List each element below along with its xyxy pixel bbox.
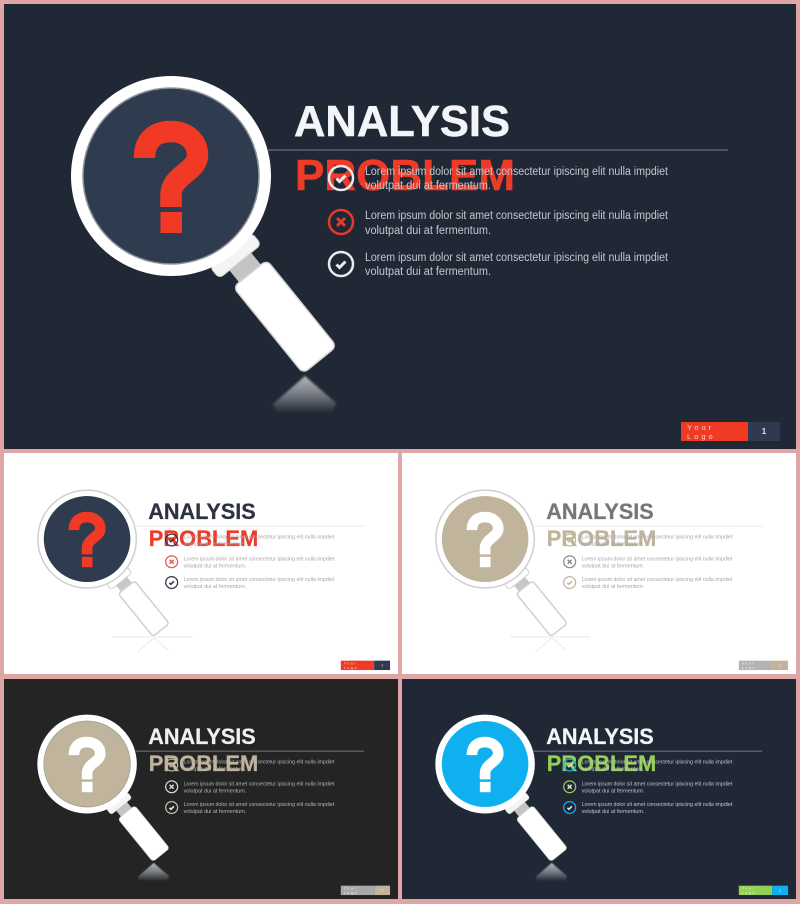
text: item 3: volutpat dui at fermentum. [365,266,491,278]
title: PROBLEM: PROBLEM [295,151,515,200]
panel: main dark navy slide [4,4,796,449]
magnifying glass [38,490,172,638]
icon: check 1 [564,759,576,771]
panel: white slide with tan accents [402,453,796,674]
text: item 3: Lorem ipsum dolor sit amet consectetur ipiscing elit nulla impdiet [582,577,733,583]
title: PROBLEM: PROBLEM [547,751,656,776]
text: item 2: volutpat dui at fermentum. [582,789,645,795]
text: item 1: Lorem ipsum dolor sit amet consectetur ipiscing elit nulla impdiet [365,166,669,178]
handle reflection [138,863,169,881]
text: item 1: Lorem ipsum dolor sit amet consectetur ipiscing elit nulla impdiet [582,760,733,766]
text: item 3: Lorem ipsum dolor sit amet consectetur ipiscing elit nulla impdiet [582,802,733,808]
footer: logo and page number: Logo [687,432,716,441]
text: item 1: volutpat dui at fermentum. [582,541,645,547]
text: item 3: volutpat dui at fermentum. [582,809,645,815]
icon: check 2 [564,577,576,588]
icon: question mark [472,742,498,792]
footer: logo and page number [739,886,788,895]
panel: white slide with red accents [4,453,398,674]
icon: cross [166,781,178,793]
icon: check 1 [329,166,353,190]
text: item 3: Lorem ipsum dolor sit amet consectetur ipiscing elit nulla impdiet [365,252,669,264]
text: item 1: Lorem ipsum dolor sit amet consectetur ipiscing elit nulla impdiet [184,535,335,541]
icon: question mark [74,742,100,792]
text: item 3: volutpat dui at fermentum. [184,584,247,590]
text: item 2: Lorem ipsum dolor sit amet consectetur ipiscing elit nulla impdiet [184,556,335,562]
footer: logo and page number [739,661,788,670]
footer: logo and page number: 1 [762,427,767,436]
icon: check 2 [166,577,178,588]
footer: logo and page number: Your [742,887,755,891]
title: ANALYSIS: ANALYSIS [546,724,654,749]
icon: cross [166,556,178,568]
magnifying glass [71,76,341,377]
icon: check 2 [166,802,178,813]
text: item 2: volutpat dui at fermentum. [365,225,491,237]
text: item 1: volutpat dui at fermentum. [365,180,491,192]
title: PROBLEM: PROBLEM [149,526,258,551]
text: item 2: Lorem ipsum dolor sit amet consectetur ipiscing elit nulla impdiet [582,556,733,562]
text: item 3: Lorem ipsum dolor sit amet consectetur ipiscing elit nulla impdiet [184,802,335,808]
title: PROBLEM: PROBLEM [547,526,656,551]
footer: logo and page number: Logo [344,666,358,670]
icon: check 2 [564,802,576,813]
footer: logo and page number [341,661,390,670]
panel: charcoal slide with tan accents [4,679,398,899]
title: ANALYSIS: ANALYSIS [148,724,256,749]
text: item 3: Lorem ipsum dolor sit amet consectetur ipiscing elit nulla impdiet [184,577,335,583]
icon: cross [329,210,353,234]
icon: question mark [144,132,198,233]
icon: check 1 [166,759,178,771]
text: item 2: Lorem ipsum dolor sit amet consectetur ipiscing elit nulla impdiet [582,781,733,787]
icon: check 1 [564,534,576,546]
text: item 1: volutpat dui at fermentum. [184,766,247,772]
icon: question mark [472,517,498,567]
magnifying glass [435,715,570,863]
text: item 2: volutpat dui at fermentum. [184,564,247,570]
footer: logo and page number: Your [344,662,357,666]
magnifying glass [436,490,570,638]
icon: cross [564,556,576,568]
footer: logo and page number: 1 [381,888,383,893]
footer: logo and page number [681,422,780,441]
footer: logo and page number: 1 [381,663,383,668]
icon: cross [564,781,576,793]
footer: logo and page number [341,886,390,895]
title: ANALYSIS: ANALYSIS [294,97,510,146]
footer: logo and page number: Your [742,662,755,666]
footer: logo and page number: 1 [779,663,781,668]
text: item 2: Lorem ipsum dolor sit amet consectetur ipiscing elit nulla impdiet [184,781,335,787]
icon: question mark [74,517,100,567]
text: item 3: volutpat dui at fermentum. [184,809,247,815]
handle reflection [510,637,590,652]
text: item 3: volutpat dui at fermentum. [582,584,645,590]
text: item 1: Lorem ipsum dolor sit amet consectetur ipiscing elit nulla impdiet [184,760,335,766]
text: item 1: volutpat dui at fermentum. [582,766,645,772]
handle reflection [273,376,336,413]
handle reflection [112,637,192,652]
icon: check 1 [166,534,178,546]
footer: logo and page number: Logo [742,666,756,670]
title: PROBLEM: PROBLEM [149,751,258,776]
footer: logo and page number: Logo [344,891,358,895]
footer: logo and page number: Your [344,887,357,891]
text: item 1: Lorem ipsum dolor sit amet consectetur ipiscing elit nulla impdiet [582,535,733,541]
title: ANALYSIS: ANALYSIS [546,499,654,524]
footer: logo and page number: Logo [742,891,756,895]
panel: navy slide with blue and green accents [402,679,796,899]
text: item 1: volutpat dui at fermentum. [184,541,247,547]
magnifying glass [37,715,172,863]
footer: logo and page number: 1 [779,888,781,893]
text: item 2: Lorem ipsum dolor sit amet consectetur ipiscing elit nulla impdiet [365,210,669,222]
footer: logo and page number: Your [687,423,714,432]
handle reflection [536,863,567,881]
title: ANALYSIS: ANALYSIS [148,499,256,524]
icon: check 2 [329,252,353,276]
text: item 2: volutpat dui at fermentum. [582,564,645,570]
text: item 2: volutpat dui at fermentum. [184,789,247,795]
